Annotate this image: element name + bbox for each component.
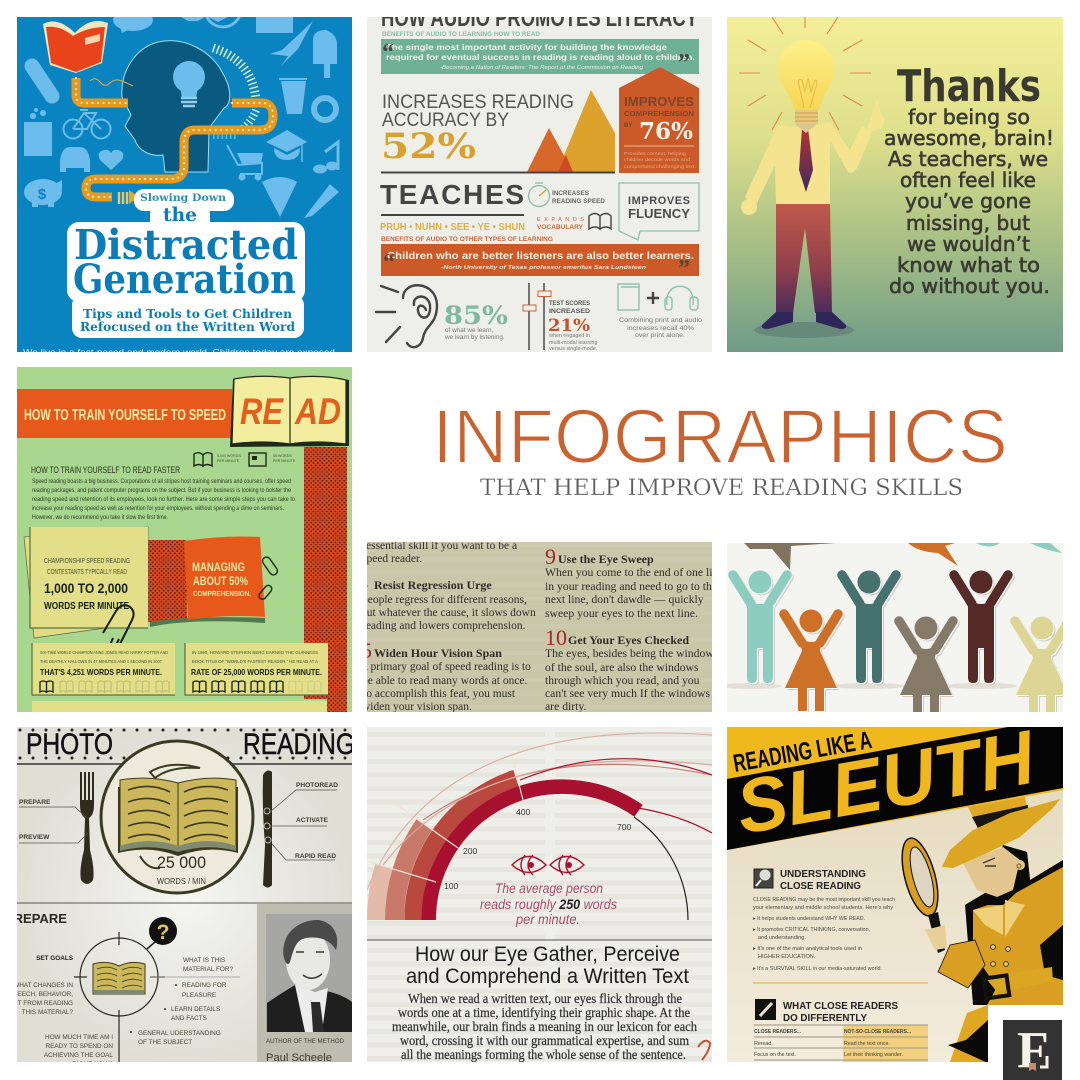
subheading: benefits learning to read: BENEFITS OF AUDIO TO LEARNING HOW TO READ	[382, 31, 540, 38]
close reading list: ▸ It promotes CRITICAL THINKING, conversation,	[753, 927, 870, 933]
comparison table: Focus on the text.	[754, 1052, 796, 1058]
panel: photo reading	[5, 727, 355, 1068]
icon: pencil box	[755, 999, 776, 1020]
green quote banner	[381, 39, 699, 76]
orange house: comprehension 76%: IMPROVES	[624, 95, 694, 109]
icon: magnifier box	[754, 869, 773, 888]
mountains	[527, 90, 615, 172]
icons: print plus audio	[618, 284, 698, 310]
recall text: over print alone.	[635, 332, 685, 339]
intro paragraph: reading packages, and patent computer programs on the subject. But if your business is looking to bolster the	[32, 488, 292, 494]
close reading list: HIGHER EDUCATION.	[758, 954, 816, 960]
stat: 21%: INCREASED	[549, 308, 590, 315]
gauge numbers	[444, 807, 632, 891]
open book: read: AD	[294, 391, 341, 432]
panel: thanks brain	[727, 17, 1063, 352]
icons: paperclips	[258, 556, 279, 601]
focus stripes around head	[90, 48, 256, 135]
title text: Tips and Tools to Get Children	[83, 306, 292, 321]
orange quote banner	[381, 244, 699, 276]
fact box: Anne Jones: THE DEATHLY HALLOWS IN 47 MINUTES AND 1 SECOND IN 2007	[40, 659, 162, 665]
left questions: WHAT CHANGES IN	[13, 982, 73, 989]
reading speed label: INCREASES	[552, 190, 590, 197]
halftone strip	[304, 447, 347, 712]
expands vocabulary label: EXPANDS	[537, 217, 584, 223]
detective illustration	[895, 797, 1063, 1063]
gauge caption: The average person	[495, 881, 603, 896]
icons: book and newspaper speeds: PER MINUTE	[273, 459, 296, 463]
stat: 21%: versus single-mode.	[549, 346, 597, 352]
stat: 52%: ACCURACY BY	[382, 109, 509, 131]
comparison table: Reread.	[754, 1041, 773, 1047]
gauge numbers: 700	[617, 822, 632, 832]
panel: speed reading tips text	[357, 540, 724, 713]
thanks message: do without you.	[889, 274, 1050, 298]
right answers: MATERIAL FOR?	[183, 966, 234, 973]
gauge numbers: 400	[516, 807, 531, 817]
subheading: other learning: BENEFITS OF AUDIO TO OTHER TYPES OF LEARNING	[381, 236, 553, 243]
stat: 21%: when engaged in	[548, 333, 590, 339]
right column text: Get Your Eyes Checked	[568, 633, 689, 647]
author sidebar: Paul Scheele	[266, 1052, 332, 1064]
main title: INFOGRAPHICS	[432, 394, 1008, 480]
right column text: through which you read, and you	[545, 674, 700, 687]
author sidebar	[257, 904, 352, 1064]
right column text: sweep your eyes to the next line.	[545, 607, 698, 620]
what close readers heading: WHAT CLOSE READERS	[783, 1000, 898, 1012]
fact box: Howard Berg: RATE OF 25,000 WORDS PER MINUTE.	[191, 667, 322, 677]
left column text: reading and lowers comprehension.	[362, 620, 526, 632]
orange house: comprehension 76%	[619, 67, 699, 173]
heading: reading like a: READING LIKE A	[731, 726, 874, 778]
stat: 21%: multi-modal learning	[549, 340, 598, 346]
comparison table: NOT-SO-CLOSE READERS...	[844, 1029, 911, 1035]
intro paragraph: Speed reading boasts a big business. Corporations of all stripes host training seminars and courses, offer speed	[32, 479, 291, 485]
gauge caption: per minute.	[515, 912, 580, 927]
icon: open book	[589, 214, 611, 229]
title text: Generation	[73, 256, 296, 303]
panel: slowing down the distracted generation	[17, 0, 352, 357]
title text: Distracted	[74, 221, 298, 269]
knife labels: ACTIVATE	[296, 817, 329, 824]
right answers: LEARN DETAILS	[171, 1006, 220, 1013]
close reading list: ▸ It's a SURVIVAL SKILL in our media-saturated world.	[753, 966, 882, 972]
orange quote banner: Children who are better listeners are also better learners.	[387, 251, 694, 262]
orange house: comprehension 76%: BY	[624, 123, 632, 129]
recall text: Combining print and audio	[619, 317, 702, 324]
thanks message: we wouldn’t	[907, 232, 1030, 256]
red numbers: 5	[361, 638, 372, 663]
orange house: comprehension 76%: Provides context, helping	[624, 151, 686, 157]
figures	[733, 570, 1069, 718]
panel: reading like a sleuth	[727, 715, 1063, 1063]
target diagram with book	[74, 917, 240, 1062]
right column text: of the soul, are also the windows	[545, 661, 699, 674]
recall text	[619, 317, 702, 339]
expands vocabulary label	[537, 217, 584, 229]
heading: How our Eye Gather, Perceive	[415, 943, 680, 966]
green quote banner: “	[382, 40, 394, 66]
figure with bulb head	[741, 40, 885, 338]
logo letter: F	[1017, 1022, 1049, 1079]
lower yellow box	[32, 701, 327, 712]
right answers	[130, 957, 234, 1046]
close reading list: ▸ It's one of the main analytical tools used in	[753, 946, 862, 952]
icon: stopwatch	[528, 183, 550, 206]
intro paragraph	[32, 479, 296, 521]
stat: 85%: 85%	[444, 301, 508, 330]
left questions: RIGHT NOW?	[72, 1061, 113, 1068]
right column text: in your reading and need to go to the	[545, 580, 717, 593]
red numbers: 9	[545, 544, 556, 569]
fact box: Anne Jones: THAT'S 4,251 WORDS PER MINUTE.	[40, 667, 162, 677]
icon: finger swipe	[103, 605, 134, 645]
speech bubbles	[744, 543, 1062, 570]
fork labels	[19, 799, 88, 843]
yellow top with black band	[727, 727, 1063, 850]
heading: sleuth: SLEUTH	[730, 715, 1042, 851]
sticky note: championship: CONTESTANTS TYPICALLY READ	[47, 567, 127, 576]
left column text: but whatever the cause, it slows down	[361, 607, 536, 619]
orange house: comprehension 76%: COMPREHENSION	[624, 111, 694, 118]
heading: photo reading: PHOTO	[26, 728, 113, 761]
red numbers	[357, 544, 567, 663]
target diagram with book: ?	[157, 921, 169, 944]
understanding heading	[780, 868, 866, 892]
fact box: Anne Jones: SIX-TIME WORLD CHAMPION ANNE JONES READ HARRY POTTER AND	[40, 650, 168, 656]
fact box: Howard Berg: IN 1990, HOWARD STEPHEN BERG EARNED THE GUINNESS	[192, 650, 318, 656]
panel: how audio promotes literacy	[367, 4, 712, 352]
gauge caption	[480, 881, 617, 927]
orange page: managing 50%	[148, 536, 265, 627]
intro paragraph: reading speed and retention of its employees, look no further. Here are some simple steps you can take to	[32, 497, 296, 503]
left questions: ACT FROM READING	[9, 1000, 73, 1007]
fact box: Howard Berg	[185, 643, 328, 695]
knife labels	[264, 782, 338, 860]
open book: read: RE	[240, 391, 284, 432]
sticky note: championship: WORDS PER MINUTE	[44, 600, 129, 612]
left questions: READY TO SPEND ON	[46, 1043, 113, 1050]
icon: red book	[43, 21, 108, 73]
red numbers: 4	[357, 570, 368, 595]
left questions	[9, 955, 113, 1068]
thanks message: Thanks	[897, 61, 1041, 112]
orange page: managing 50%: MANAGING	[192, 562, 245, 574]
icons: book and newspaper speeds: 50 WORDS	[273, 454, 292, 458]
right column text: When you come to the end of one line	[545, 566, 724, 579]
header dots	[20, 730, 352, 758]
left column text: To accomplish this feat, you must	[360, 688, 516, 700]
left column text: be able to read many words at once.	[362, 675, 528, 687]
understanding heading: CLOSE READING	[780, 880, 861, 892]
icon: eyes	[512, 855, 584, 875]
close reading list: CLOSE READING may be the most important skill you teach	[753, 897, 895, 903]
thanks message: often feel like	[900, 168, 1036, 192]
plate with book	[101, 741, 253, 893]
author sidebar: AUTHOR OF THE METHOD	[266, 1038, 344, 1045]
icon: arrow into title	[129, 190, 136, 204]
right answers: WHAT IS THIS	[183, 957, 225, 964]
stat: 52%	[382, 94, 573, 158]
stat: 85%	[445, 305, 508, 340]
orange house: comprehension 76%: comprehend challenging text.	[624, 164, 696, 170]
stat: 85%: of what we learn,	[445, 327, 494, 334]
intro paragraph: However, we do recommend you take it slow the first time.	[32, 515, 168, 521]
intro paragraph: increase your reading speed as well as retention for your employees, without spending a dime on seminars.	[32, 506, 284, 512]
fact box: Anne Jones	[32, 643, 175, 695]
right column text: The eyes, besides being the windows	[545, 647, 719, 660]
phonetic word: PRUH • NUHN • SEE • YE • SHUN	[380, 221, 525, 233]
stat: 52%: 52%	[381, 126, 476, 167]
right answers: GENERAL UDERSTANDING	[138, 1030, 221, 1037]
icon: ear	[376, 285, 437, 347]
gauge arcs	[370, 757, 688, 920]
title text: Slowing Down	[140, 193, 227, 204]
right column text: Use the Eye Sweep	[558, 552, 654, 566]
thanks message	[884, 61, 1054, 298]
icons: distractions	[24, 0, 339, 218]
comparison table: CLOSE READERS...	[754, 1029, 801, 1035]
heading: photo reading	[26, 728, 355, 761]
knife labels: PHOTOREAD	[296, 782, 338, 789]
orange house: comprehension 76%: 76%	[639, 118, 693, 145]
recall text: increases recall 40%	[627, 325, 694, 332]
left column text: essential skill if you want to be a	[366, 540, 517, 552]
prepare heading: PREPARE	[5, 911, 67, 926]
close reading list: and understanding.	[758, 935, 806, 941]
open book: read	[230, 376, 349, 447]
thanks message: know what to	[897, 253, 1040, 277]
left column text: Widen Hour Vision Span	[374, 646, 502, 660]
comparison table: Read the text once.	[844, 1041, 890, 1047]
right column text	[545, 552, 724, 713]
heading: photo reading: READING	[243, 728, 355, 761]
body paragraph	[392, 992, 697, 1063]
light rays	[739, 17, 871, 130]
comparison table	[754, 1025, 928, 1062]
icon: sliders	[523, 283, 551, 350]
icons: book and newspaper speeds	[194, 453, 296, 466]
left questions: SPEECH, BEHAVIOR,	[9, 991, 73, 998]
left questions: ACHIEVING THE GOAL	[44, 1052, 113, 1059]
green quote banner: required for eventual success in reading is reading aloud to children.	[386, 52, 695, 62]
orange house: comprehension 76%: children decode words and	[624, 157, 690, 163]
title text	[73, 193, 298, 334]
orange page: managing 50%: COMPREHENSION.	[193, 589, 251, 598]
logo corner	[988, 1005, 1064, 1080]
icon: head silhouette with light bulb	[122, 41, 230, 172]
red numbers: 10	[545, 625, 567, 650]
heading	[406, 943, 689, 988]
plate with book: WORDS / MIN	[157, 877, 206, 886]
callout: improves fluency	[619, 183, 699, 240]
callout: improves fluency: FLUENCY	[628, 207, 691, 221]
callout: improves fluency: IMPROVES	[628, 195, 690, 207]
icons: book and newspaper speeds: PER MINUTE	[217, 459, 240, 463]
title text: the	[163, 204, 197, 226]
sticky note: championship: 1,000 TO 2,000	[44, 580, 128, 596]
left questions: SET GOALS	[36, 955, 74, 962]
close reading list: ▸ It helps students understand WHY WE READ.	[753, 916, 865, 922]
expands vocabulary label: VOCABULARY	[537, 224, 584, 231]
close reading list	[753, 897, 895, 972]
intro text cut off at panel edge: We live in a fast-paced and modern world. Children today are exposed	[23, 347, 335, 357]
body paragraph: meanwhile, our brain finds a meaning in our lexicon for each	[392, 1020, 697, 1035]
orange heading band	[17, 389, 232, 438]
green quote banner: -Becoming a Nation of Readers: The Report of the Commission on Reading	[440, 65, 643, 71]
body paragraph: When we read a written text, our eyes flick through the	[408, 992, 682, 1007]
what close readers heading	[783, 1000, 898, 1024]
panel: average reading speed gauge	[367, 727, 712, 1063]
what close readers heading: DO DIFFERENTLY	[783, 1012, 867, 1024]
right answers: PLEASURE	[182, 992, 216, 999]
thanks message: missing, but	[906, 211, 1030, 235]
green quote banner: ”	[678, 50, 690, 76]
thin arcs	[367, 733, 712, 890]
stat: 21%: 21%	[548, 316, 590, 336]
stat: 85%: we learn by listening.	[444, 334, 505, 341]
right answers: READING FOR	[182, 982, 227, 989]
body paragraph: words one at a time, identifying their graphic shape. At the	[398, 1006, 690, 1021]
body paragraph: all the meanings forming the whole sense of the sentence.	[401, 1048, 686, 1063]
fact box: Howard Berg: BOOK TITLE OF "WORLD'S FASTEST READER." HE READ AT A	[192, 659, 319, 665]
green quote banner: The single most important activity for building the knowledge	[386, 42, 667, 52]
winding orange road	[76, 78, 273, 204]
right column text: next line, don't dawdle — quickly	[545, 593, 704, 606]
orange quote banner: -North University of Texas professor emeritus Sara Lundsteen	[441, 265, 647, 271]
panel: people figures	[722, 543, 1069, 718]
understanding heading: UNDERSTANDING	[780, 868, 866, 880]
gauge numbers: 200	[463, 846, 478, 856]
panel: slowing down the distracted generation: $	[38, 186, 47, 203]
knife labels: RAPID READ	[295, 853, 336, 860]
title text: Refocused on the Written Word	[80, 319, 295, 334]
icon: fork	[80, 772, 94, 884]
title cloud	[67, 189, 305, 338]
intro heading: HOW TO TRAIN YOURSELF TO READ FASTER	[31, 465, 180, 476]
left questions: HOW MUCH TIME AM I	[45, 1034, 113, 1041]
right answers: OF THE SUBJECT	[138, 1039, 192, 1046]
heading: and Comprehend a Written Text	[406, 965, 689, 988]
close reading list: your elementary and middle school students. Here's why	[753, 905, 893, 911]
left column text: A primary goal of speed reading is to	[360, 661, 531, 673]
right column text: are dirty.	[545, 700, 587, 713]
stat: 21%	[548, 300, 598, 352]
gauge numbers: 100	[444, 881, 459, 891]
left column text	[360, 540, 536, 713]
gauge caption: reads roughly 250 words	[480, 897, 617, 912]
fork labels: PREVIEW	[19, 834, 50, 841]
panel: train yourself to speed read	[17, 367, 352, 712]
sticky note: championship: CHAMPIONSHIP SPEED READING	[44, 556, 130, 565]
stat: 52%: INCREASES READING	[382, 91, 574, 113]
sticky note: championship	[24, 527, 148, 638]
thanks message: awesome, brain!	[884, 126, 1054, 150]
fork labels: PREPARE	[19, 799, 51, 806]
orange quote banner: ”	[678, 256, 690, 282]
thanks message: As teachers, we	[888, 147, 1048, 171]
right answers: AND FACTS	[171, 1015, 207, 1022]
left column text: speed reader.	[362, 553, 422, 565]
left column text: Resist Regression Urge	[374, 578, 492, 592]
reading speed label: READING SPEED	[552, 198, 605, 205]
floor shadows	[722, 683, 1017, 689]
stat: 21%: TEST SCORES	[549, 300, 590, 307]
left column text: widen your vision span.	[362, 701, 472, 713]
orange heading band: HOW TO TRAIN YOURSELF TO SPEED	[24, 407, 226, 424]
right column text: can't see very much If the windows	[545, 687, 710, 700]
icons: book and newspaper speeds: 5,000 WORDS	[217, 454, 241, 458]
plate with book: 25 000	[157, 854, 206, 872]
thanks message: you’ve gone	[905, 189, 1031, 213]
body paragraph: word, crossing it with our grammatical expertise, and sum	[400, 1034, 689, 1049]
red question mark fragment	[698, 1041, 710, 1060]
subtitle: THAT HELP IMPROVE READING SKILLS	[480, 475, 963, 501]
word: teaches: TEACHES	[380, 179, 524, 210]
left questions: THIS MATERIAL?	[22, 1009, 73, 1016]
thanks message: for being so	[908, 105, 1030, 129]
comparison table: Let their thinking wander.	[844, 1052, 903, 1058]
left column text: people regress for different reasons,	[362, 594, 527, 606]
heading: HOW AUDIO PROMOTES LITERACY	[381, 4, 698, 32]
orange page: managing 50%: ABOUT 50%	[193, 576, 248, 588]
icon: knife	[263, 771, 272, 888]
orange quote banner: “	[383, 250, 395, 276]
reading speed label	[552, 190, 605, 203]
